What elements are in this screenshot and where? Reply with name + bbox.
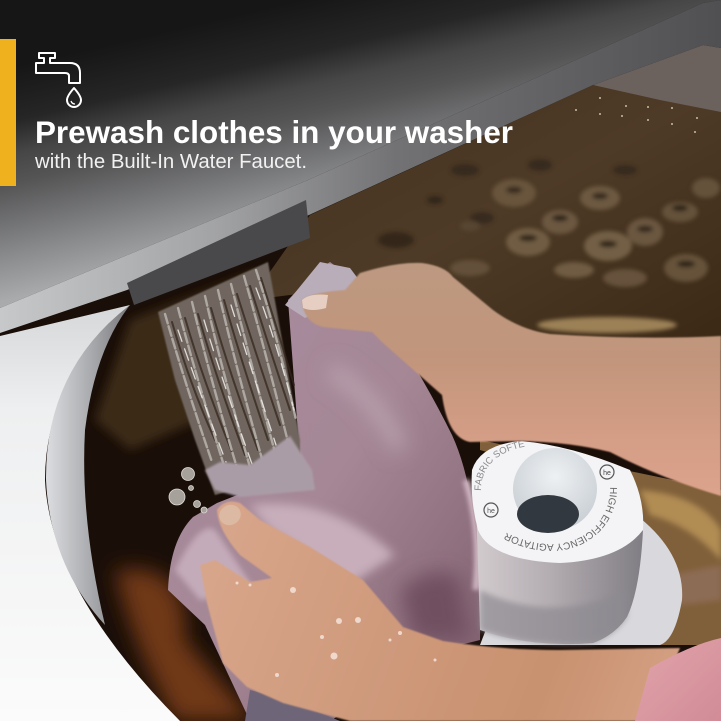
lid front lip — [0, 0, 721, 333]
white tub edge — [0, 305, 180, 721]
water streams from faucet — [158, 262, 300, 495]
agitator cylinder — [476, 480, 643, 644]
washer lid — [0, 0, 721, 308]
yellow accent bar — [0, 39, 16, 186]
pink ribbed sleeve — [635, 638, 721, 721]
agitator base disc — [480, 518, 682, 645]
water splash foam — [205, 436, 315, 497]
agitator top ring — [472, 440, 644, 563]
drum dimples — [378, 159, 720, 287]
lavender cloth — [168, 262, 480, 721]
ribbed drum wall — [593, 45, 721, 112]
cylinder lower shadow — [480, 590, 627, 644]
dark faucet housing — [127, 200, 310, 305]
upper hand and arm — [302, 263, 721, 496]
agitator top ring: FABRIC SOFTE — [474, 440, 524, 490]
agitator top ring: he — [487, 508, 495, 515]
heading: Prewash clothes in your washer — [35, 115, 513, 150]
water beads on lower hand — [236, 582, 436, 677]
grey inner rim — [46, 305, 130, 625]
lower thumbnail — [215, 501, 245, 529]
icon: water faucet with drop — [36, 53, 81, 107]
subheading: with the Built-In Water Faucet. — [34, 151, 307, 173]
water droplets — [169, 468, 207, 513]
agitator top ring: HIGH EFFICIENCY AGITATOR — [504, 488, 617, 551]
drum rivet dots — [575, 97, 698, 133]
agitator top ring: he — [603, 470, 611, 477]
lower hand and arm — [200, 502, 680, 721]
upper hand thumbnail — [302, 295, 328, 310]
